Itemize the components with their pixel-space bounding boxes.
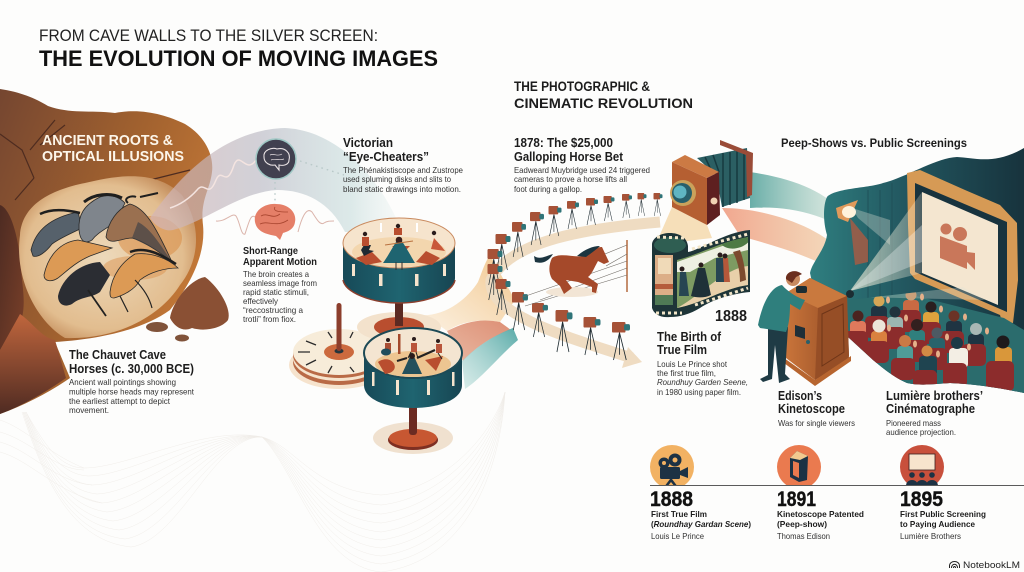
text: Lumiere Cinematographe: Lumière brothers’ xyxy=(886,388,983,403)
text: Chauvet Cave: the earliest attempt to depict xyxy=(69,397,171,406)
text: Birth of True Film: True Film xyxy=(657,342,707,357)
icon: salmon brain with waves xyxy=(216,204,334,240)
text: Birth of True Film xyxy=(657,308,748,397)
timeline entry: 1891: Kinetoscope Patented xyxy=(777,509,864,519)
text: Victorian Eye-Cheaters: The Phénakistiscope and Zustrope xyxy=(343,166,463,175)
text: Short-Range Apparent Motion xyxy=(243,245,317,324)
title xyxy=(39,26,438,71)
curtain backdrop xyxy=(810,148,1024,393)
text: Short-Range Apparent Motion: “reccostructing a xyxy=(243,306,303,315)
heading: ancient roots: ANCIENT ROOTS & xyxy=(42,132,173,149)
timeline entry: 1895: Lumière Brothers xyxy=(900,532,961,541)
cave boulders xyxy=(170,277,229,330)
viewer xyxy=(758,271,807,383)
text: Chauvet Cave: Ancient wall pointings showing xyxy=(69,378,176,387)
panel: cave xyxy=(0,89,229,414)
timeline entry: 1891: 1891 xyxy=(777,488,816,511)
text: Short-Range Apparent Motion: trotli” from fiox. xyxy=(243,315,296,324)
text: 1878 horse bet: cameras to prove a horse lifts all xyxy=(514,175,627,184)
text: Birth of True Film: Louis Le Prince shot xyxy=(657,360,728,369)
timeline entry: 1895 xyxy=(900,488,986,541)
text: Edison's Kinetoscope: Kinetoscope xyxy=(778,401,845,416)
timeline entry: 1888: 1888 xyxy=(650,488,693,511)
text: 1878 horse bet xyxy=(514,135,650,194)
icon: lower zoetrope xyxy=(364,328,462,454)
text: Short-Range Apparent Motion: Apparent Motion xyxy=(243,256,317,268)
arrow: flow bands from zoetropes to cameras xyxy=(417,255,518,389)
icon: upper zoetrope xyxy=(343,218,455,342)
icon: film strip with scene xyxy=(652,230,751,317)
text: Edison's Kinetoscope xyxy=(778,388,855,428)
text: Lumiere Cinematographe: Pioneered mass xyxy=(886,419,941,428)
icon: spinning disk xyxy=(289,303,389,389)
icon: brain circle xyxy=(256,139,296,179)
heading: ancient roots: OPTICAL ILLUSIONS xyxy=(42,148,184,165)
cave horse paintings xyxy=(31,193,178,316)
spotlight xyxy=(836,200,890,265)
text: 1878 horse bet: Galloping Horse Bet xyxy=(514,149,624,164)
cave wall xyxy=(19,176,196,338)
timeline entry: 1891: Thomas Edison xyxy=(777,532,830,541)
text: Peep-Shows heading: Peep-Shows vs. Public Screenings xyxy=(781,136,967,150)
title: FROM CAVE WALLS TO THE SILVER SCREEN: xyxy=(39,26,378,45)
arrow: bands from camera to theater xyxy=(655,172,860,285)
text: Birth of True Film: the first true film, xyxy=(657,369,716,378)
text: Birth of True Film: 1888 xyxy=(715,308,747,325)
text: Edison's Kinetoscope: Was for single viewers xyxy=(778,419,855,428)
timeline entry: 1895: to Paying Audience xyxy=(900,519,975,529)
icon: galloping horse with trip wires xyxy=(520,240,627,306)
timeline entry: 1888 xyxy=(650,488,751,541)
text: Victorian Eye-Cheaters: bland static drawings into motion. xyxy=(343,185,461,194)
arrow: camera arc track xyxy=(491,222,660,368)
text: Chauvet Cave: multiple horse heads may represent xyxy=(69,388,195,396)
dotted connectors xyxy=(275,161,344,205)
heading: ancient roots xyxy=(42,132,184,165)
title: THE EVOLUTION OF MOVING IMAGES xyxy=(39,46,438,71)
screen frame xyxy=(907,170,1018,323)
text: Birth of True Film: The Birth of xyxy=(657,329,722,344)
text: Chauvet Cave: Horses (c. 30,000 BCE) xyxy=(69,361,194,376)
text: Victorian Eye-Cheaters: “Eye-Cheaters” xyxy=(343,149,429,164)
text: Victorian Eye-Cheaters: Victorian xyxy=(343,135,393,150)
heading: photographic revolution: THE PHOTOGRAPHIC & xyxy=(514,79,650,94)
text: Chauvet Cave: The Chauvet Cave xyxy=(69,347,166,362)
timeline entry: 1888: First True Film xyxy=(651,509,707,519)
icon: movie camera on screen xyxy=(940,224,975,270)
timeline entry: 1888: Louis Le Prince xyxy=(651,532,704,541)
timeline axis xyxy=(650,484,1024,486)
icon: kinetoscope with viewer xyxy=(758,271,854,386)
text: Short-Range Apparent Motion: Short-Range xyxy=(243,245,298,257)
text: Short-Range Apparent Motion: effectively xyxy=(243,297,279,306)
icon: large bellows camera xyxy=(670,140,753,225)
projector beam xyxy=(850,192,922,291)
icon: kinetoscope 1891 xyxy=(777,445,821,489)
text: Short-Range Apparent Motion: rapid static stimuli, xyxy=(243,288,309,297)
text: Victorian Eye-Cheaters xyxy=(343,135,463,194)
text: Lumiere Cinematographe: audience projection. xyxy=(886,428,956,437)
logo: NotebookLM: NotebookLM xyxy=(963,560,1020,571)
text: Short-Range Apparent Motion: seamless image from xyxy=(243,279,317,288)
panel: theater xyxy=(810,148,1024,394)
text: Chauvet Cave: movement. xyxy=(69,406,109,415)
cave rock xyxy=(0,89,212,414)
text: Chauvet Cave xyxy=(69,347,195,415)
timeline entry: 1895: First Public Screening xyxy=(900,509,986,519)
text: Short-Range Apparent Motion: The broin creates a xyxy=(243,270,309,279)
icon: cinema 1895 xyxy=(900,445,944,489)
heading: photographic revolution xyxy=(514,79,693,111)
text: Birth of True Film: in 1980 using paper film. xyxy=(657,388,741,397)
kinetoscope cabinet xyxy=(784,278,854,386)
arrow: arc from cave over the brain xyxy=(150,128,402,232)
text: Lumiere Cinematographe: Cinématographe xyxy=(886,401,975,416)
movie screen xyxy=(922,192,998,305)
timeline entry: 1891: (Peep-show) xyxy=(777,519,827,529)
text: Birth of True Film: Roundhuy Garden Seene, xyxy=(657,378,748,387)
icon: camera array xyxy=(488,193,662,360)
text: 1878 horse bet: foot during a gallop. xyxy=(514,185,582,194)
timeline entry: 1895: 1895 xyxy=(900,488,943,511)
heading: photographic revolution: CINEMATIC REVOLUTION xyxy=(514,96,693,111)
audience xyxy=(844,283,1024,394)
timeline entry: 1888: (Roundhay Gardan Scene) xyxy=(651,519,751,529)
text: Edison's Kinetoscope: Edison’s xyxy=(778,388,822,403)
text: Lumiere Cinematographe xyxy=(886,388,983,437)
timeline entry: 1891 xyxy=(777,488,864,541)
text: Victorian Eye-Cheaters: used spluming disks and slits to xyxy=(343,175,451,184)
text: 1878 horse bet: 1878: The $25,000 xyxy=(514,135,613,150)
text: 1878 horse bet: Eadweard Muybridge used 24 triggered xyxy=(514,166,650,175)
icon: brain wave line xyxy=(170,160,256,208)
icon: film camera 1888 xyxy=(650,445,694,489)
